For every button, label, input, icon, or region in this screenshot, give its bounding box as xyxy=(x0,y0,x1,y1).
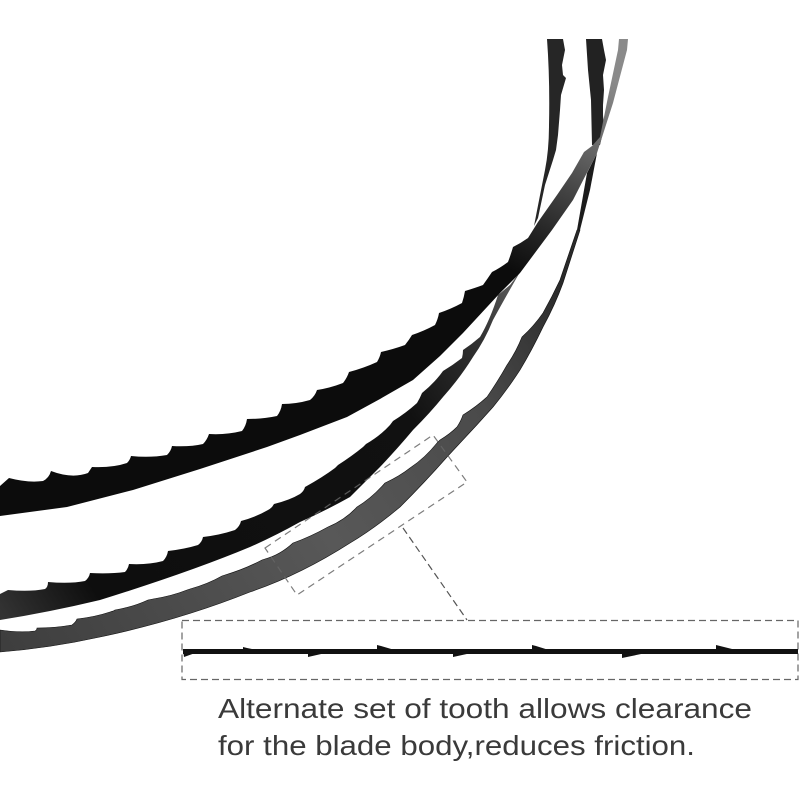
blade: bottom grey band, upper strip xyxy=(586,39,606,145)
blade: middle band, upper strip xyxy=(534,39,566,226)
blade: thick top band xyxy=(0,39,628,516)
caption text: for the blade body,reduces friction. xyxy=(218,730,695,761)
dashed leader line xyxy=(403,528,467,620)
dashed callout frame on blade teeth xyxy=(265,435,467,595)
blade: middle band, lower section xyxy=(0,272,520,620)
blade: bottom grey band, crossing strip xyxy=(577,153,597,230)
caption text: Alternate set of tooth allows clearance xyxy=(218,693,752,724)
caption text xyxy=(218,693,752,761)
side view of blade with alternate teeth xyxy=(183,645,798,658)
dashed callout frame with side view xyxy=(182,620,798,680)
blade: bottom grey band, lower section xyxy=(0,230,580,652)
